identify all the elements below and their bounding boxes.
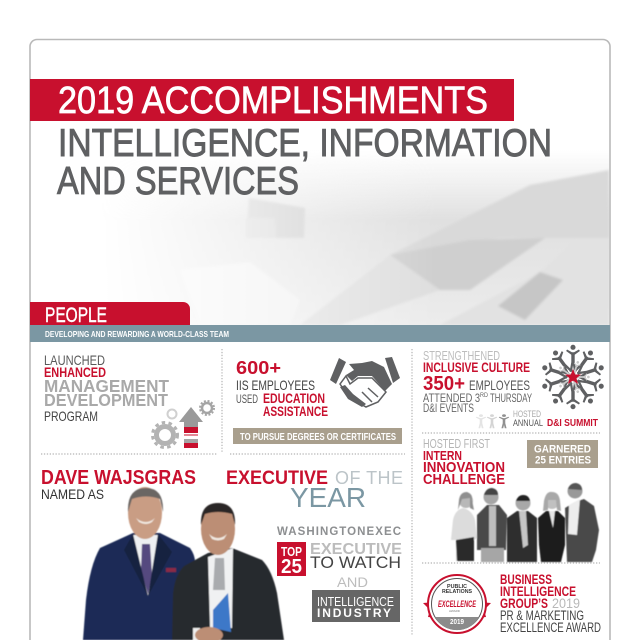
- panel: pr and marketing excellence award: GROUP’S: [500, 595, 548, 611]
- panel: intern innovation challenge: HOSTED FIRST: [423, 436, 490, 451]
- badge: intelligence industry: INDUSTRY: [317, 606, 391, 620]
- badge: top 25: TOP: [281, 544, 302, 559]
- panel: inclusive culture: HOSTED: [513, 409, 541, 419]
- panel: inclusive culture: 350+: [423, 373, 465, 395]
- panel: top 25 executive to watch: [277, 526, 402, 622]
- panel: inclusive culture: THURSDAY: [490, 391, 532, 405]
- callout: entries: [527, 440, 598, 468]
- icon: circle of people with star: [540, 345, 606, 409]
- icon: handshake: [330, 357, 400, 407]
- panel: intern innovation challenge: INNOVATION: [423, 459, 505, 476]
- panel: executive of the year heading: DAVE WAJSGRAS: [41, 467, 196, 489]
- panel: education assistance: 600+: [236, 357, 281, 378]
- panel: executive of the year heading: EXECUTIVE: [226, 468, 328, 489]
- panel: education assistance: EDUCATION: [263, 390, 325, 406]
- subtitle: AND SERVICES: [57, 160, 299, 203]
- icon: award badge: AWARD: [449, 609, 461, 613]
- icon: award badge: EXCELLENCE: [438, 599, 477, 609]
- panel: intern innovation challenge: INTERN: [423, 448, 462, 463]
- panel: pr and marketing excellence award: BUSINESS: [500, 571, 552, 587]
- panel: top 25 executive to watch: TO WATCH: [310, 553, 401, 572]
- header background graphic: [188, 167, 609, 325]
- panel: pr and marketing excellence award: [423, 571, 601, 635]
- panel: management development: LAUNCHED: [44, 352, 105, 368]
- panel: pr and marketing excellence award: INTELLIGENCE: [500, 583, 576, 599]
- person: left executive: [83, 487, 195, 640]
- section subtitle bar: [30, 325, 610, 342]
- panel: executive of the year heading: [41, 467, 403, 513]
- panel: inclusive culture: INCLUSIVE CULTURE: [423, 360, 530, 375]
- panel: management development: DEVELOPMENT: [44, 390, 168, 410]
- panel: education assistance: TO PURSUE DEGREES OR CERTIFICATES: [240, 432, 396, 443]
- panel: intern innovation challenge: CHALLENGE: [423, 471, 505, 488]
- icon: small people row: [476, 414, 509, 428]
- panel: executive of the year heading: OF THE: [335, 468, 403, 488]
- panel: inclusive culture: STRENGTHENED: [423, 348, 500, 363]
- panel: inclusive culture: D&I SUMMIT: [547, 418, 598, 429]
- panel: education assistance: IIS EMPLOYEES: [236, 377, 315, 393]
- icon: award badge: PUBLIC: [447, 584, 467, 590]
- panel: pr and marketing excellence award: PR & MARKETING: [500, 608, 584, 623]
- icon: award badge: 2019: [450, 619, 464, 626]
- panel: inclusive culture: D&I EVENTS: [423, 401, 474, 415]
- title banner: 2019 ACCOMPLISHMENTS: [58, 80, 488, 122]
- section subtitle bar: DEVELOPING AND REWARDING A WORLD-CLASS TEAM: [45, 329, 229, 339]
- panel: pr and marketing excellence award: 2019: [552, 596, 580, 611]
- photo: two executives: [83, 487, 284, 640]
- panel: management development: [44, 352, 214, 448]
- panel: top 25 executive to watch: WASHINGTONEXEC: [277, 526, 401, 538]
- panel: management development: ENHANCED: [44, 364, 106, 380]
- subtitle: INTELLIGENCE, INFORMATION: [58, 122, 552, 165]
- panel: management development: PROGRAM: [44, 408, 98, 424]
- panel: top 25 executive to watch: EXECUTIVE: [310, 541, 402, 558]
- panel: inclusive culture: EMPLOYEES: [469, 377, 530, 393]
- panel: education assistance: USED: [236, 392, 258, 406]
- section tab: people: PEOPLE: [45, 304, 107, 327]
- callout: entries: GARNERED: [534, 444, 591, 456]
- panel: inclusive culture: [423, 345, 606, 429]
- panel: inclusive culture: RD: [480, 393, 489, 399]
- callout: entries: 25 ENTRIES: [535, 454, 591, 466]
- icon: award badge: [423, 575, 491, 633]
- panel: education assistance: [233, 357, 402, 444]
- person: right executive: [172, 503, 284, 640]
- panel: management development: MANAGEMENT: [44, 376, 169, 396]
- icon: award badge: RELATIONS: [442, 589, 472, 595]
- panel: top 25 executive to watch: AND: [337, 574, 368, 590]
- subtitle: [57, 122, 552, 203]
- icon: gears and arrow: [152, 401, 214, 448]
- badge: top 25: [277, 542, 306, 578]
- panel: inclusive culture: ANNUAL: [513, 418, 543, 429]
- badge: intelligence industry: [312, 590, 400, 622]
- panel: education assistance: ASSISTANCE: [263, 403, 328, 419]
- badge: top 25: 25: [281, 556, 302, 578]
- panel: inclusive culture: ATTENDED 3: [423, 391, 480, 405]
- panel: executive of the year heading: YEAR: [290, 482, 366, 513]
- panel: executive of the year heading: NAMED AS: [41, 486, 104, 502]
- section tab: people: [30, 302, 190, 327]
- group photo: [451, 483, 599, 562]
- panel: intern innovation challenge: [423, 436, 599, 562]
- badge: intelligence industry: INTELLIGENCE: [317, 595, 394, 609]
- panel: pr and marketing excellence award: EXCELLENCE AWARD: [500, 620, 601, 635]
